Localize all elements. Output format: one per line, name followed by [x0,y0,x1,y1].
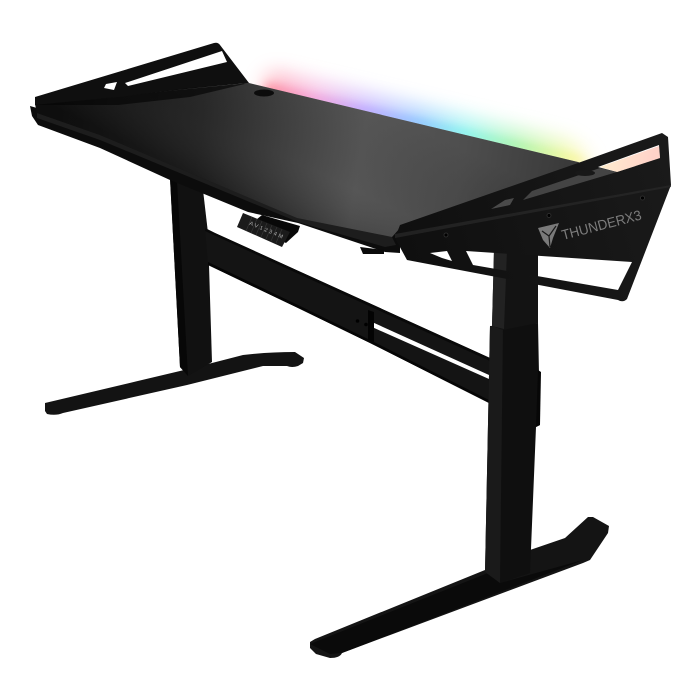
beam slot [372,322,489,379]
wing screws [444,196,644,237]
wing body [395,133,671,301]
RGB glow behind desk [260,72,590,170]
front leg upper section [492,250,538,330]
under-desk bracket [360,247,384,254]
window glow [600,146,660,172]
rear leg column [170,178,212,376]
see-through desk patches [523,168,617,200]
beam screw holes [356,319,368,326]
logo wordmark: THUNDERX3 [560,207,643,243]
desk top surface [35,83,600,237]
cable grommet [254,90,274,96]
front foot [310,517,609,658]
front desk leg and foot [310,250,609,658]
logo emblem [538,223,559,248]
wing fold line [395,185,671,238]
crossbar beam [205,228,490,403]
ThunderX3 logo [538,207,643,248]
rear foot [45,352,304,415]
keypad labels: A V 1 2 3 4 M [248,221,284,241]
desk front edge [30,106,400,253]
desk board [30,83,600,254]
controller keypad [237,213,300,247]
right wing panel [395,133,671,301]
rear desk leg and foot [45,178,304,415]
left wing panel [35,43,249,105]
front leg lower section [485,323,540,583]
